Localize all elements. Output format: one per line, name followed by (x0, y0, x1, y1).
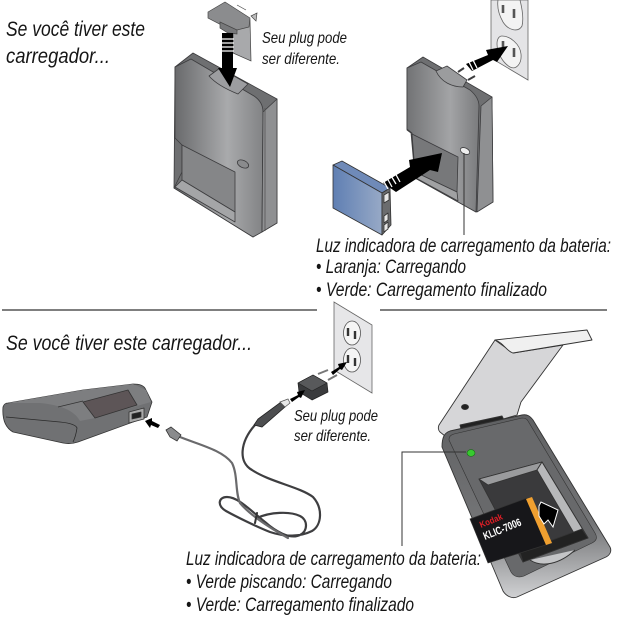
illustration: camera on side (3, 384, 152, 444)
leader line: bottom indicator (402, 452, 466, 546)
illustration: Kodak battery (470, 497, 552, 563)
arrow: cable into camera (145, 418, 160, 428)
legend: bottom charger indicator: • Verde piscando: Carregando (186, 572, 392, 593)
illustration: plug above charger (208, 2, 257, 61)
heading: second charger: Se você tiver este carregador... (6, 332, 252, 355)
legend: top charger indicator: • Laranja: Carregando (316, 257, 466, 278)
illustration: Kodak battery: KLIC-7006 (482, 517, 523, 543)
note: plug may differ (top): ser diferente. (262, 51, 340, 68)
illustration: wall outlet (top) (491, 0, 528, 80)
indicator light (467, 450, 475, 456)
note: plug may differ (bottom): ser diferente. (294, 428, 371, 445)
note: plug may differ (bottom) (294, 408, 378, 445)
lid (438, 340, 563, 436)
arrow: plug into outlet (465, 46, 508, 72)
legend: top charger indicator: • Verde: Carregamento finalizado (316, 280, 547, 301)
legend: bottom charger indicator: • Verde: Carregamento finalizado (186, 595, 414, 616)
arrow: cable into adapter (290, 390, 305, 402)
illustration: battery (top) (333, 161, 391, 235)
illustration: wall outlet (bottom) (334, 302, 372, 393)
illustration: Kodak battery: Kodak (478, 511, 505, 530)
illustration: USB cable (166, 399, 320, 538)
divider (2, 309, 607, 311)
arrow: adapter into outlet (331, 362, 347, 375)
illustration: charger with plug attached (right) (407, 57, 493, 212)
arrow: battery into window (539, 502, 558, 527)
window (479, 462, 588, 562)
heading: first charger (6, 18, 145, 68)
heading: first charger: carregador... (6, 45, 110, 68)
heading: first charger: Se você tiver este (6, 18, 145, 41)
leader line: top indicator (463, 153, 465, 235)
legend: top charger indicator (316, 236, 611, 301)
arrow: battery into charger (382, 153, 442, 192)
illustration: USB wall adapter (298, 370, 337, 400)
illustration: open battery charger (438, 330, 611, 598)
illustration: charger front view (left) (174, 53, 277, 237)
arrow: plug into charger (218, 33, 237, 87)
legend: bottom charger indicator: Luz indicadora de carregamento da bateria: (186, 549, 481, 570)
note: plug may differ (top) (262, 30, 347, 68)
note: plug may differ (bottom): Seu plug pode (294, 408, 378, 425)
base (442, 415, 611, 598)
legend: bottom charger indicator (186, 549, 481, 616)
note: plug may differ (top): Seu plug pode (262, 30, 347, 47)
